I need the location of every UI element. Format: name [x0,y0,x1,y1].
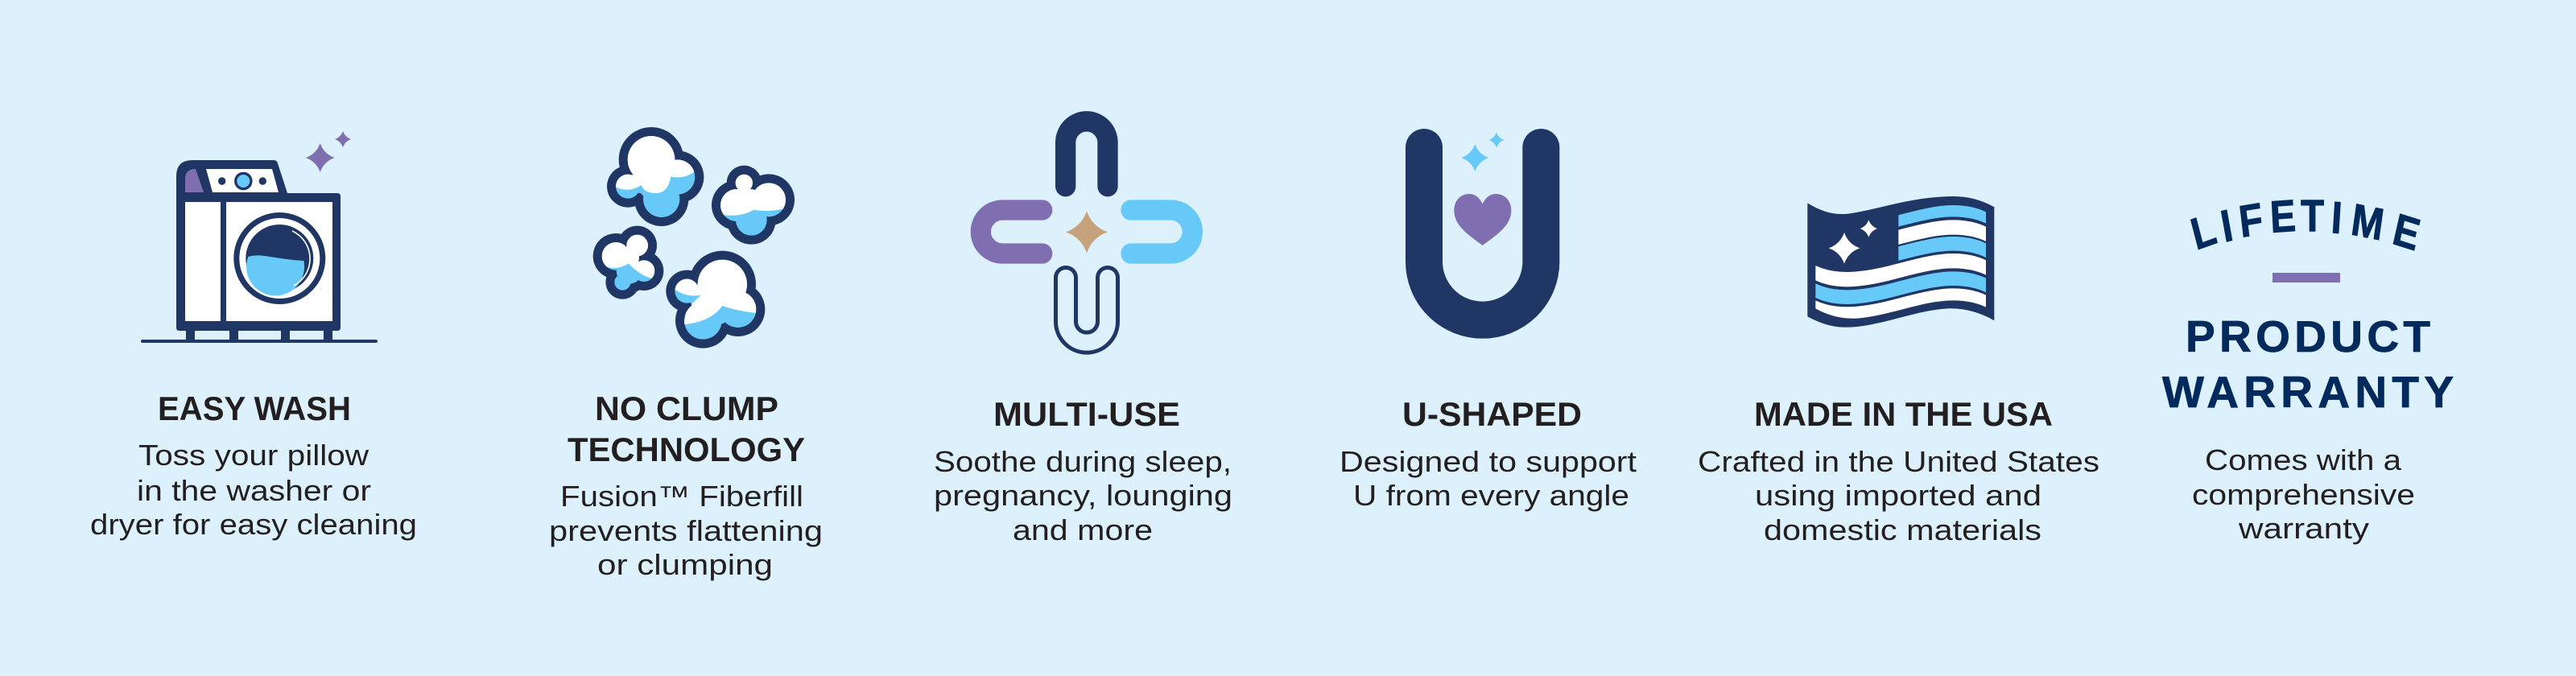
text: multi-use description: pregnancy, lounging [934,479,1232,512]
icon: waving flag [1807,196,1994,328]
text: multi-use description: Soothe during sleep, [934,445,1232,478]
panel: easy wash [90,131,417,541]
cluster: right [712,166,795,245]
badge: lifetime product warranty lockup [2162,191,2454,417]
heading: multi-use: MULTI-USE [993,395,1180,433]
text: multi-use description [934,445,1232,546]
text: u-shaped description: Designed to support [1340,445,1637,478]
icon: purple heart [1454,194,1511,245]
icon: small blue sparkle [1489,133,1504,147]
text: warranty description [2192,443,2415,545]
heading: warranty: WARRANTY [2162,367,2454,417]
text: easy wash description: dryer for easy cleaning [90,508,417,541]
text: made in the usa description [1698,445,2099,546]
text: no clump description [549,480,823,581]
heading: made in the usa: MADE IN THE USA [1754,395,2053,433]
shape: purple left pillow [980,210,1042,254]
panel: made in the usa [1698,196,2099,546]
icon: fiberfill clusters [585,126,799,348]
heading: no clump technology [568,390,805,468]
text: multi-use description: and more [1013,513,1153,546]
cluster: bottom right [666,251,765,348]
text: made in the usa description: using imported and [1755,479,2041,512]
icon: four pillow positions [980,122,1192,343]
text: easy wash description: Toss your pillow [138,439,369,472]
heading: no clump technology: NO CLUMP [595,390,778,427]
shape: outlined U pillow [1066,278,1108,343]
icon: tan sparkle [1066,211,1108,253]
panel: multi-use [934,122,1232,546]
cluster: top left [607,127,704,226]
heading: product: PRODUCT [2186,311,2430,361]
text: no clump description: prevents flattening [549,514,823,547]
text: u-shaped description: U from every angle [1353,479,1629,512]
panel: no clump technology [549,126,823,581]
icon: small white sparkle [1860,220,1877,237]
heading: lifetime arc: LIFETIME [2186,191,2425,261]
text: no clump description: or clumping [597,548,773,581]
divider: purple bar [2273,273,2340,282]
icon: large blue sparkle [1461,144,1488,171]
stripes: long lower stripes [1815,254,1986,319]
stripes: short upper stripes [1898,205,1986,261]
shape: blue right pillow [1131,210,1192,254]
text: warranty description: Comes with a [2205,443,2402,476]
text: warranty description: comprehensive [2192,478,2415,511]
heading: no clump technology: TECHNOLOGY [568,431,805,468]
text: u-shaped description [1340,445,1637,512]
text: made in the usa description: domestic materials [1764,513,2041,546]
icon: washing machine [142,131,376,341]
panel: u-shaped [1340,133,1637,512]
text: easy wash description [90,439,417,541]
heading: u-shaped: U-SHAPED [1402,395,1582,433]
icon: large white sparkle [1829,233,1860,264]
text: warranty description: warranty [2238,512,2369,545]
shape: navy U [1424,147,1541,320]
icon: U pillow with heart [1424,133,1541,320]
text: easy wash description: in the washer or [137,474,371,507]
text: made in the usa description: Crafted in the United States [1698,445,2099,478]
text: no clump description: Fusion™ Fiberfill [560,480,803,513]
shape: navy arch [1066,122,1108,187]
panel: lifetime product warranty [2162,191,2454,545]
cluster: bottom left [592,225,663,299]
heading: easy wash: EASY WASH [158,390,351,427]
